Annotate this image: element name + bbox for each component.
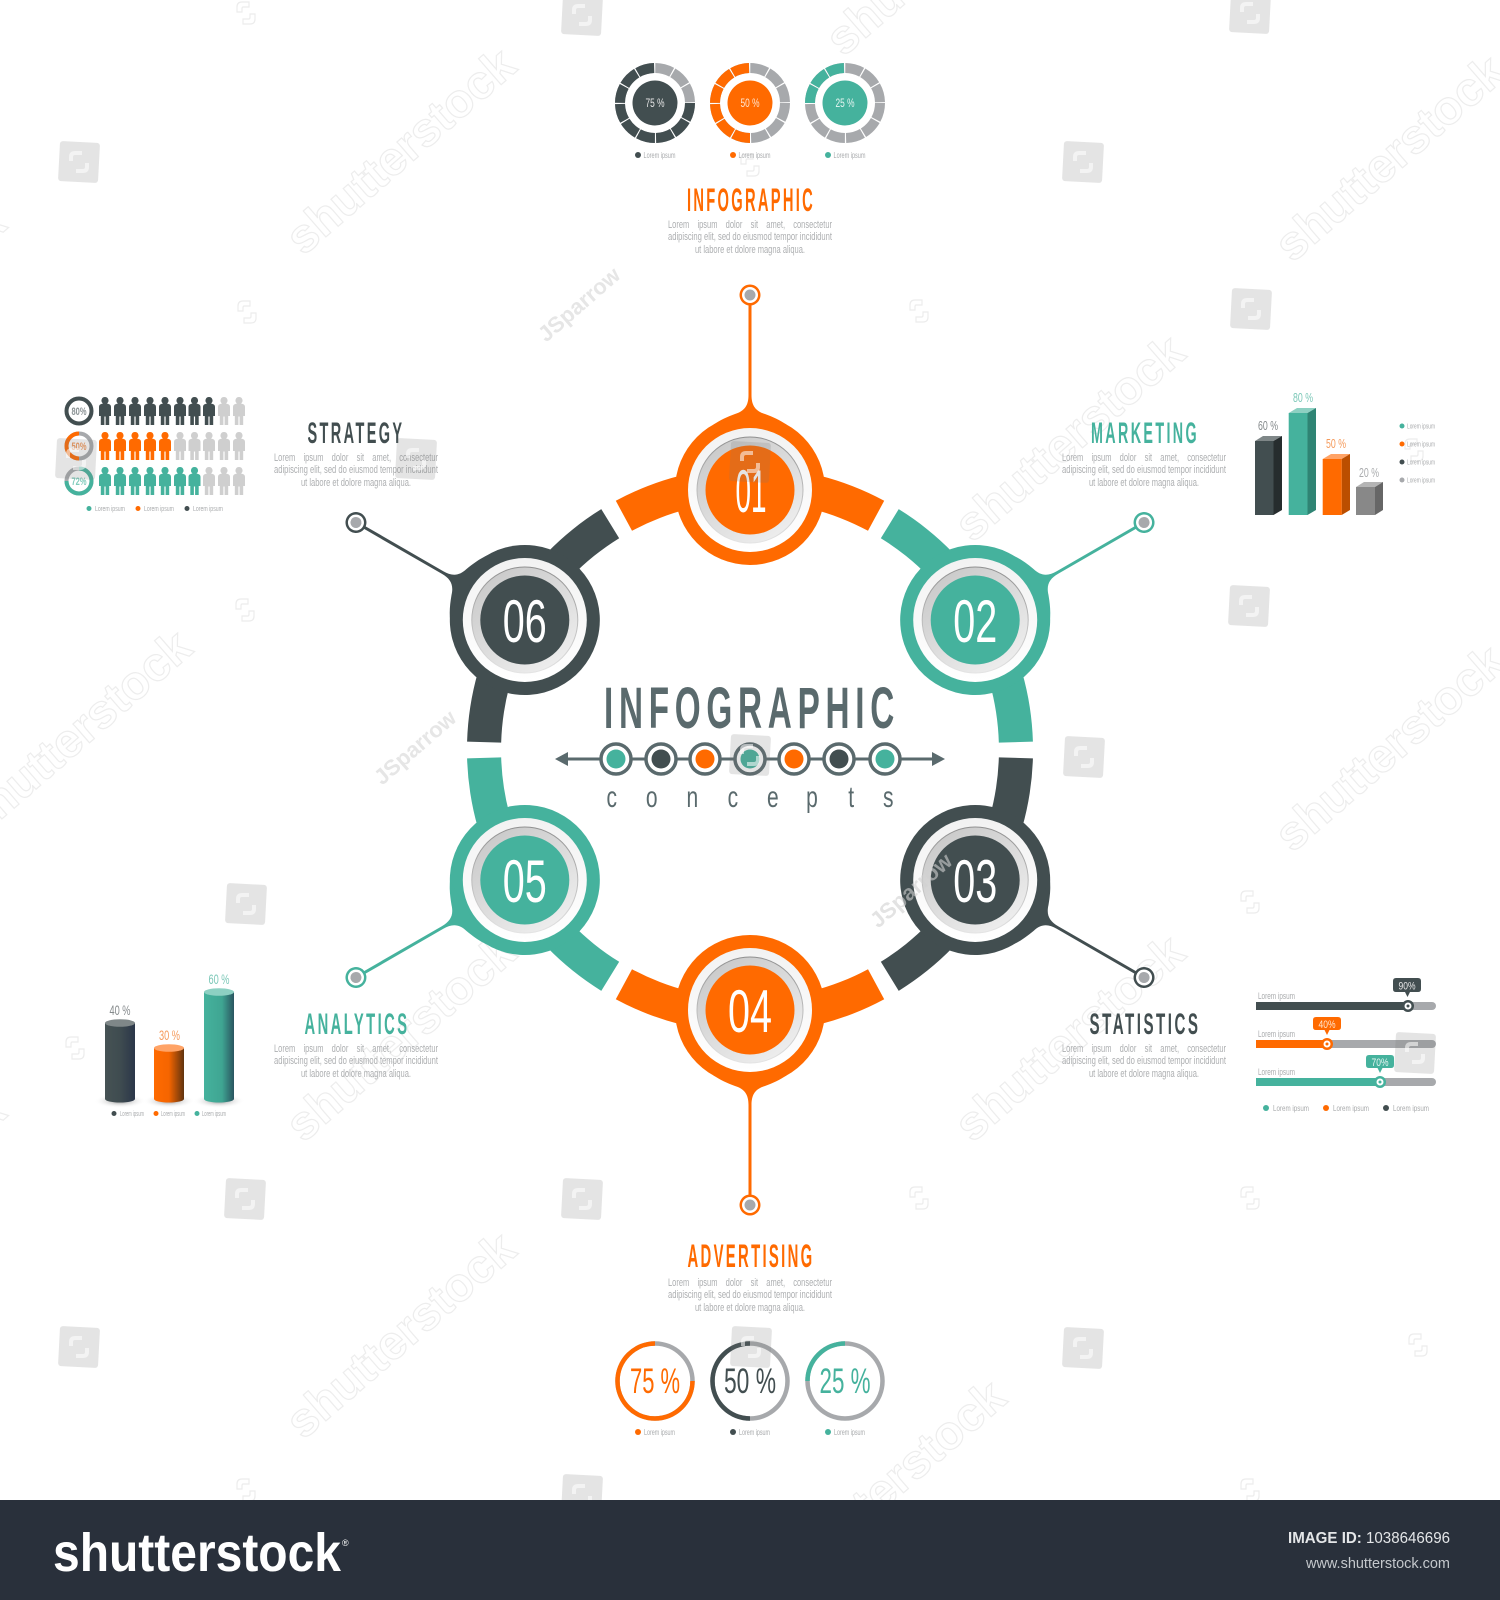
- slider 40 percent: [1256, 1017, 1436, 1050]
- node 05 hub: [463, 818, 587, 942]
- background watermark text: shutterstock: [276, 924, 526, 1152]
- text block: marketing: [1062, 452, 1226, 489]
- text block: infographic: adipiscing elit, sed do eiusmod tempor incididunt: [668, 231, 832, 243]
- background watermark text: shutterstock: [276, 37, 526, 265]
- text block: advertising: ut labore et dolore magna aliqua.: [695, 1302, 805, 1314]
- ring 25 percent: [808, 1344, 882, 1437]
- text block: advertising: Lorem ipsum dolor sit amet, consectetur: [668, 1277, 832, 1289]
- text block: marketing: ut labore et dolore magna aliqua.: [1089, 477, 1199, 489]
- ring 75 percent: [618, 1344, 692, 1437]
- node 04 hub: 04: [728, 978, 772, 1045]
- donut 50 percent: Lorem ipsum: [738, 151, 771, 160]
- row 50 percent: 50%: [72, 441, 87, 453]
- footer url: www.shutterstock.com: [1305, 1555, 1450, 1572]
- slider 70 percent: 70%: [1372, 1057, 1389, 1069]
- slider 40 percent: Lorem ipsum: [1258, 1029, 1295, 1039]
- watermark over node 03: JSparrow: [865, 847, 958, 933]
- center title: INFOGRAPHIC: [604, 676, 900, 741]
- node 02 hub: [913, 558, 1037, 682]
- cylinder 40 percent: [94, 1002, 146, 1108]
- node 04: [616, 935, 884, 1216]
- donut 25 percent: Lorem ipsum: [834, 151, 866, 160]
- slider 70 percent: [1256, 1055, 1436, 1088]
- text block: analytics: ut labore et dolore magna aliqua.: [301, 1068, 411, 1080]
- center timeline arrow with dots: [555, 744, 945, 774]
- footer registered mark: ®: [342, 1538, 349, 1548]
- cylinder 30 percent: [143, 1027, 195, 1108]
- marketing legend: Lorem ipsum: [1407, 424, 1435, 430]
- text block: marketing: Lorem ipsum dolor sit amet, consectetur: [1062, 452, 1226, 464]
- analytics chart: cylinders: [94, 971, 245, 1118]
- ring 25 percent: 25 %: [820, 1362, 870, 1401]
- background watermark text: shutterstock: [766, 1369, 1016, 1597]
- strategy legend: Lorem ipsum: [144, 506, 174, 513]
- node 01 arc and leader: [616, 284, 884, 565]
- text block: analytics: adipiscing elit, sed do eiusmod tempor incididunt: [274, 1055, 438, 1067]
- ring 75 percent: Lorem ipsum: [644, 1428, 675, 1437]
- donut 75 percent: [620, 68, 690, 160]
- ring 50 percent: 50 %: [724, 1362, 776, 1401]
- node 02: [843, 401, 1220, 774]
- strategy chart: people pictogram: [66, 397, 245, 513]
- text: STRATEGY: [308, 417, 404, 450]
- top section: segmented donut charts: [620, 68, 880, 160]
- text block: analytics: Lorem ipsum dolor sit amet, consectetur: [274, 1043, 438, 1055]
- background watermark text: shutterstock: [276, 1221, 526, 1449]
- text block: marketing: adipiscing elit, sed do eiusmod tempor incididunt: [1062, 464, 1226, 476]
- strategy legend: Lorem ipsum: [193, 506, 223, 513]
- slider 90 percent: Lorem ipsum: [1258, 991, 1295, 1001]
- slider 40 percent: 40%: [1318, 1019, 1336, 1031]
- text block: analytics: [274, 1043, 438, 1080]
- node 03 hub: [913, 818, 1037, 942]
- background watermark text: shutterstock: [945, 924, 1195, 1152]
- row 50 percent: [66, 432, 245, 460]
- bar 50 percent: [1323, 436, 1350, 515]
- strategy legend: Lorem ipsum: [95, 506, 125, 513]
- donut 75 percent: Lorem ipsum: [644, 151, 676, 160]
- marketing legend: Lorem ipsum: [1407, 460, 1435, 466]
- node 05 hub: 05: [503, 848, 547, 915]
- marketing chart: 3d bars: [1255, 390, 1435, 515]
- background watermark text: JSparrow: [369, 704, 462, 790]
- text: ANALYTICS: [304, 1008, 410, 1041]
- text block: advertising: adipiscing elit, sed do eiusmod tempor incididunt: [668, 1289, 832, 1301]
- text: MARKETING: [1091, 417, 1199, 450]
- statistics legend: Lorem ipsum: [1273, 1104, 1309, 1113]
- statistics legend: Lorem ipsum: [1393, 1104, 1429, 1113]
- text block: infographic: Lorem ipsum dolor sit amet, consectetur: [668, 219, 832, 231]
- node 02 hub: 02: [953, 588, 997, 655]
- footer image id: IMAGE ID: 1038646696: [1288, 1530, 1450, 1547]
- bar 60 percent: 60 %: [1258, 418, 1278, 433]
- row 80 percent: [66, 397, 245, 425]
- text block: infographic: [668, 219, 832, 256]
- text: ADVERTISING: [688, 1238, 814, 1274]
- heading: statistics: STATISTICS: [1090, 1008, 1200, 1041]
- ring 50 percent: [712, 1344, 788, 1437]
- footer bar: [0, 1500, 1500, 1600]
- bar 80 percent: [1289, 390, 1316, 515]
- donut 50 percent: [715, 68, 785, 160]
- bar 20 percent: 20 %: [1359, 465, 1379, 480]
- node 06 hub: 06: [503, 588, 547, 655]
- cylinder 30 percent: 30 %: [159, 1027, 180, 1043]
- text block: strategy: Lorem ipsum dolor sit amet, consectetur: [274, 452, 438, 464]
- analytics legend: Lorem ipsum: [120, 1111, 144, 1118]
- text block: strategy: adipiscing elit, sed do eiusmod tempor incididunt: [274, 464, 438, 476]
- cylinder 60 percent: [193, 971, 245, 1108]
- donut 75 percent: 75 %: [646, 96, 665, 110]
- node 01: [616, 284, 884, 565]
- background watermark text: JSparrow: [533, 261, 626, 347]
- node 06: [280, 401, 657, 774]
- text block: strategy: ut labore et dolore magna aliqua.: [301, 477, 411, 489]
- donut 25 percent: 25 %: [836, 96, 855, 110]
- node 03 hub: 03: [953, 848, 997, 915]
- analytics legend: Lorem ipsum: [202, 1111, 226, 1118]
- slider 70 percent: Lorem ipsum: [1258, 1067, 1295, 1077]
- cylinder 60 percent: 60 %: [208, 971, 230, 987]
- text block: statistics: [1062, 1043, 1226, 1080]
- node 06 hub: [463, 558, 587, 682]
- donut 50 percent: 50 %: [740, 96, 760, 110]
- bar 50 percent: 50 %: [1326, 436, 1346, 451]
- background watermark text: shutterstock: [945, 324, 1195, 552]
- text: INFOGRAPHIC: [687, 182, 815, 218]
- node 04 hub: [688, 948, 812, 1072]
- text block: statistics: Lorem ipsum dolor sit amet, consectetur: [1062, 1043, 1226, 1055]
- ring 75 percent: 75 %: [630, 1362, 680, 1401]
- analytics legend: [112, 1111, 226, 1118]
- node 03: [843, 726, 1220, 1099]
- node 04 arc and leader: [616, 935, 884, 1216]
- footer logo: shutterstock: [53, 1523, 342, 1583]
- bottom section: ring charts: [618, 1344, 882, 1437]
- marketing legend: Lorem ipsum: [1407, 442, 1435, 448]
- cylinder 40 percent: 40 %: [110, 1002, 130, 1018]
- statistics chart: sliders: [1256, 978, 1436, 1113]
- marketing legend: Lorem ipsum: [1407, 478, 1435, 484]
- slider 90 percent: [1256, 978, 1436, 1012]
- text block: infographic: ut labore et dolore magna aliqua.: [695, 244, 805, 256]
- text block: statistics: adipiscing elit, sed do eiusmod tempor incididunt: [1062, 1055, 1226, 1067]
- statistics legend: [1263, 1104, 1429, 1113]
- center subtitle: concepts: [607, 782, 894, 814]
- ring 25 percent: Lorem ipsum: [834, 1428, 865, 1437]
- strategy legend: [86, 506, 223, 513]
- statistics legend: Lorem ipsum: [1333, 1104, 1369, 1113]
- donut 25 percent: [810, 68, 880, 160]
- node 02 arc and leader: [843, 401, 1220, 774]
- bar 20 percent: [1356, 465, 1383, 515]
- text block: strategy: [274, 452, 438, 489]
- node 01 hub: [688, 428, 812, 552]
- ring 50 percent: Lorem ipsum: [739, 1428, 770, 1437]
- node 03 arc and leader: [843, 726, 1220, 1099]
- row 72 percent: [66, 467, 245, 495]
- analytics legend: Lorem ipsum: [161, 1111, 185, 1118]
- text block: advertising: [668, 1277, 832, 1314]
- node 05 arc and leader: [280, 726, 657, 1099]
- row 80 percent: 80%: [72, 406, 87, 418]
- text block: statistics: ut labore et dolore magna aliqua.: [1089, 1068, 1199, 1080]
- bar 60 percent: [1255, 418, 1282, 515]
- row 72 percent: 72%: [72, 476, 87, 488]
- node 06 arc and leader: [280, 401, 657, 774]
- bar 80 percent: 80 %: [1293, 390, 1313, 405]
- node 01 hub: 01: [736, 458, 766, 525]
- slider 90 percent: 90%: [1398, 980, 1416, 992]
- marketing legend: [1400, 424, 1435, 484]
- node 05: [280, 726, 657, 1099]
